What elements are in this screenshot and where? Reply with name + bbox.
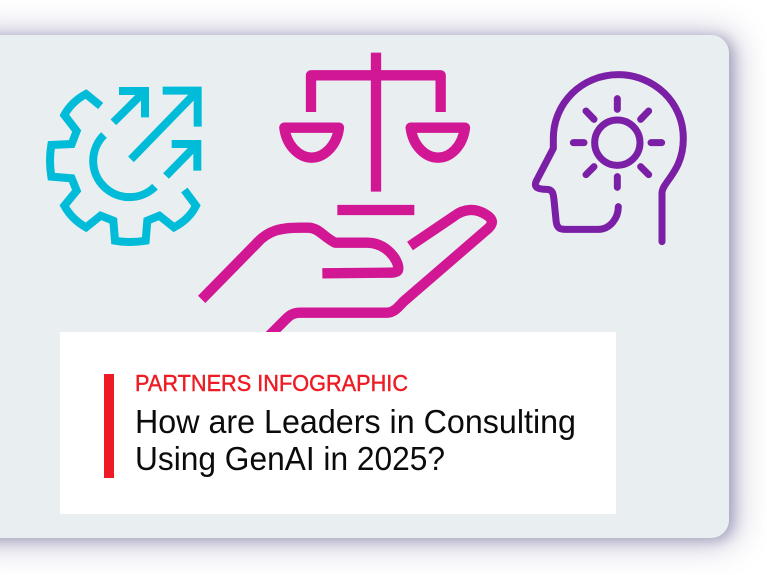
heading: Using GenAI in 2025? bbox=[135, 440, 445, 477]
icon: gear with growth arrows bbox=[50, 91, 198, 242]
eyebrow label: PARTNERS INFOGRAPHIC bbox=[135, 370, 408, 396]
icon: scales of justice on an open hand bbox=[202, 53, 492, 340]
red accent bar bbox=[104, 374, 114, 478]
panel: title box bbox=[60, 332, 616, 514]
heading: How are Leaders in Consulting bbox=[135, 403, 576, 440]
icon: head with sun bbox=[535, 75, 683, 242]
